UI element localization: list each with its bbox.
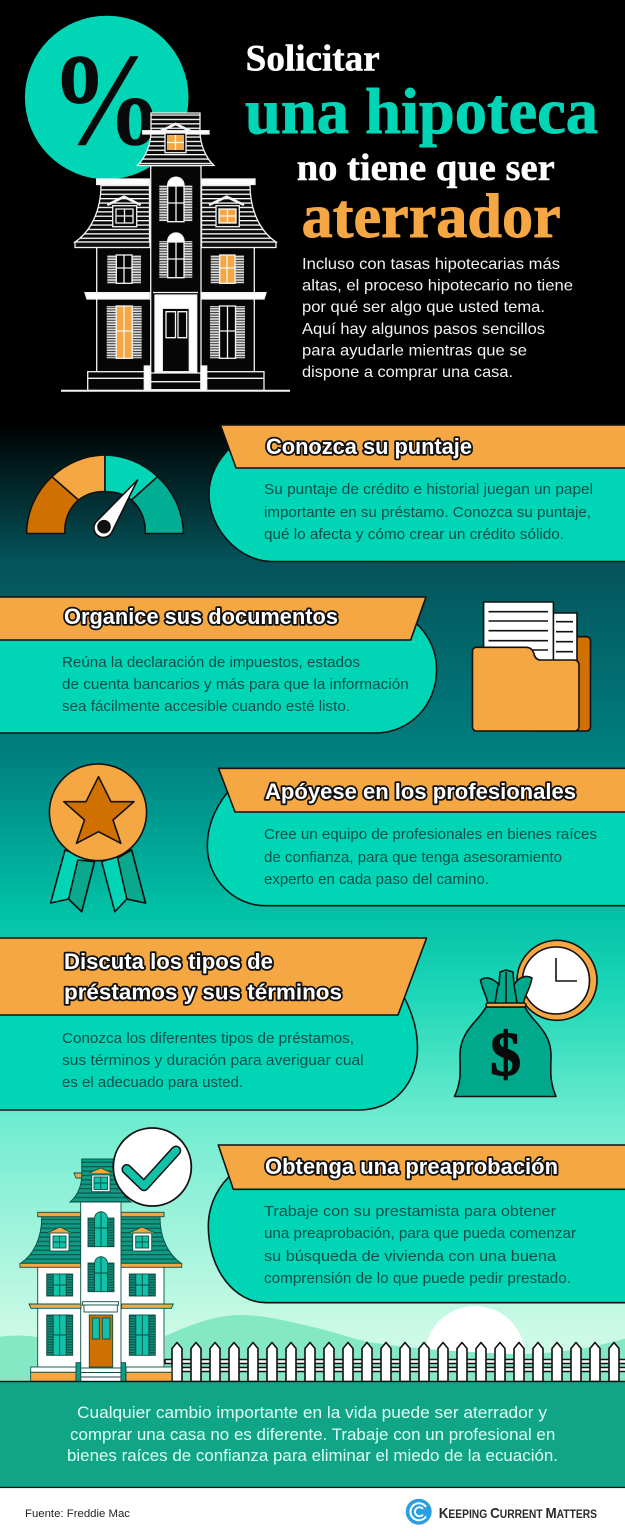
panel: discuta los tipos de prestamos: es el adecuado para usted.: [62, 1074, 243, 1091]
panel: obtenga una preaprobacion: su búsqueda de vivienda con una buena: [264, 1248, 557, 1265]
closing message band: bienes raíces de confianza para eliminar el miedo de la ecuación.: [67, 1446, 558, 1465]
panel: organice sus documentos: de cuenta bancarios y más para que la información: [62, 676, 409, 693]
panel: discuta los tipos de prestamos: Discuta los tipos de: [64, 949, 273, 974]
intro paragraph: Incluso con tasas hipotecarias más: [302, 256, 560, 273]
closing message band: comprar una casa no es diferente. Trabaje con un profesional en: [70, 1425, 555, 1444]
icon: money bag and clock: $: [490, 1021, 521, 1089]
panel: conozca su puntaje: qué lo afecta y cómo crear un crédito sólido.: [264, 526, 564, 543]
logo: keeping current matters: [406, 1499, 597, 1525]
closing message band: [0, 1382, 625, 1488]
panel: apoyese en los profesionales: experto en cada paso del camino.: [264, 871, 489, 888]
panel: apoyese en los profesionales: Apóyese en los profesionales: [265, 779, 576, 804]
logo: keeping current matters: KEEPING CURRENT MATTERS: [439, 1505, 597, 1522]
icon: money bag and clock: [454, 940, 597, 1096]
panel: obtenga una preaprobacion: una preaprobación, para que pueda comenzar: [264, 1225, 576, 1242]
panel: conozca su puntaje: Su puntaje de crédito e historial juegan un papel: [264, 481, 593, 498]
illustration: dark house: [61, 113, 290, 391]
intro paragraph: por qué ser algo que usted tema.: [302, 299, 545, 316]
intro paragraph: dispone a comprar una casa.: [302, 364, 513, 381]
icon: credit score gauge: [26, 455, 184, 537]
panel: obtenga una preaprobacion: Obtenga una preaprobación: [265, 1154, 558, 1179]
panel: organice sus documentos: Reúna la declaración de impuestos, estados: [62, 654, 360, 671]
panel: organice sus documentos: sea fácilmente accesible cuando esté listo.: [62, 698, 350, 715]
panel: organice sus documentos: [0, 597, 437, 733]
title: aterrador: [302, 183, 561, 251]
panel: obtenga una preaprobacion: comprensión de lo que puede pedir prestado.: [264, 1270, 571, 1287]
panel: apoyese en los profesionales: [207, 768, 625, 906]
panel: discuta los tipos de prestamos: préstamos y sus términos: [64, 980, 342, 1004]
title: [245, 39, 598, 251]
icon: percent circle: %: [50, 26, 164, 173]
icon: check mark circle: [113, 1128, 191, 1206]
hills and sun: [0, 1306, 625, 1406]
panel: conozca su puntaje: Conozca su puntaje: [266, 434, 472, 459]
footer background: [0, 1488, 625, 1536]
source note: Fuente: Freddie Mac: [25, 1508, 131, 1520]
panel: discuta los tipos de prestamos: Conozca los diferentes tipos de préstamos,: [62, 1030, 354, 1047]
panel: apoyese en los profesionales: de confianza, para que tenga asesoramiento: [264, 849, 562, 866]
illustration: white and teal house: [20, 1159, 182, 1382]
panel: obtenga una preaprobacion: [208, 1145, 625, 1303]
panel: obtenga una preaprobacion: Trabaje con su prestamista para obtener: [264, 1203, 556, 1220]
panel: organice sus documentos: Organice sus documentos: [64, 604, 338, 629]
panel: conozca su puntaje: [209, 425, 625, 562]
title: una hipoteca: [245, 76, 598, 147]
icon: medal: [49, 764, 147, 912]
panel: conozca su puntaje: importante en su préstamo. Conozca su puntaje,: [264, 504, 591, 521]
intro paragraph: Aquí hay algunos pasos sencillos: [302, 321, 545, 338]
intro paragraph: para ayudarle mientras que se: [302, 342, 527, 360]
panel: apoyese en los profesionales: Cree un equipo de profesionales en bienes raíces: [264, 826, 597, 843]
title: Solicitar: [246, 39, 380, 80]
intro paragraph: [302, 256, 573, 381]
closing message band: Cualquier cambio importante en la vida puede ser aterrador y: [77, 1403, 548, 1422]
intro paragraph: altas, el proceso hipotecario no tiene: [302, 278, 573, 294]
title: no tiene que ser: [297, 147, 555, 189]
panel: discuta los tipos de prestamos: sus términos y duración para averiguar cual: [62, 1052, 364, 1069]
panel: discuta los tipos de prestamos: [0, 938, 427, 1110]
picket fence: [165, 1342, 625, 1382]
icon: folder with documents: [472, 602, 590, 731]
